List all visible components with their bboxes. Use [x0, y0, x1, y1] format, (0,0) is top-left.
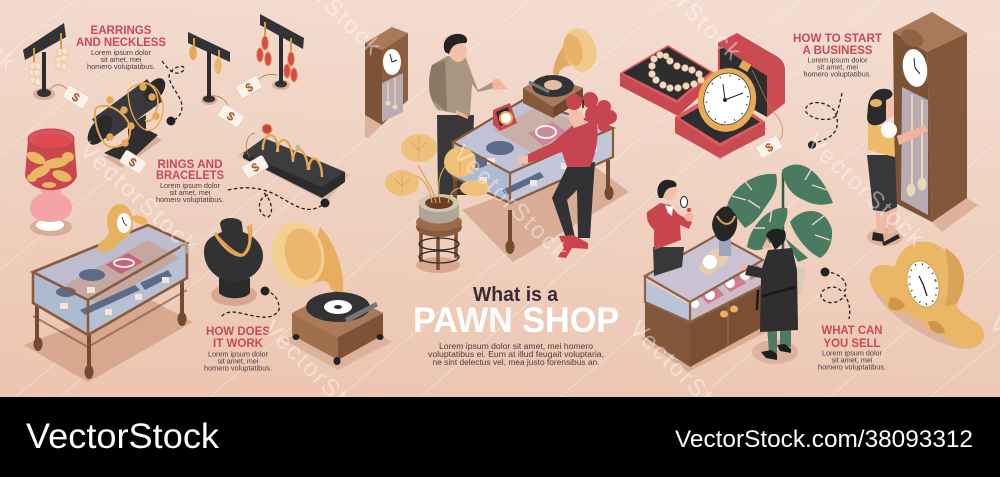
heading: rings and bracelets: [156, 157, 224, 204]
connector dot: [166, 116, 176, 126]
gold mantel clock: [862, 234, 988, 362]
heading: what is a pawn shop: voluptatibus ei. Eum at illud feugait voluptaria,: [428, 350, 604, 359]
dashed connector: what can you sell: [821, 272, 850, 319]
price tag 6: [755, 135, 783, 159]
earring stand: pearl earrings: [23, 23, 68, 100]
connector dot: [808, 141, 816, 149]
heading: what is a pawn shop: Lorem ipsum dolor sit amet, mei homero: [439, 342, 594, 351]
heading: how to start a business: A BUSINESS: [802, 43, 872, 57]
small gramophone: [523, 25, 601, 118]
heading: what is a pawn shop: PAWN SHOP: [413, 301, 619, 340]
watermarks: VectorStock: [448, 140, 574, 266]
tall grandfather clock: [893, 12, 978, 232]
man in coat: [740, 229, 798, 364]
heading: rings and bracelets: BRACELETS: [156, 168, 224, 182]
heading: what is a pawn shop: What is a: [473, 284, 559, 306]
heading: what is a pawn shop: [413, 284, 619, 367]
heading: earrings and neckless: homero voluptatibus.: [87, 64, 155, 71]
price tag 4: $: [243, 80, 256, 95]
heading: how to start a business: Lorem ipsum dolor: [808, 58, 868, 64]
heading: earrings and neckless: sit amet, mei: [100, 57, 142, 64]
heading: how to start a business: sit amet, mei: [817, 64, 858, 72]
heading: what can you sell: WHAT CAN: [822, 323, 882, 337]
gold mantel clock on case: [95, 204, 149, 256]
heading: earrings and neckless: Lorem ipsum dolor: [91, 50, 152, 57]
heading: earrings and neckless: [76, 23, 166, 71]
price tag 1: $: [69, 90, 83, 105]
connector dot: [320, 198, 330, 208]
connector dot: [820, 268, 830, 276]
jewellery box with watch: [493, 103, 517, 131]
heading: how to start a business: [793, 31, 883, 78]
heading: rings and bracelets: sit amet, mei: [170, 190, 211, 197]
heading: rings and bracelets: homero voluptatibus.: [156, 197, 224, 204]
footer band: VectorStock.com/38093312: [675, 426, 973, 453]
dashed connector: rings: [228, 188, 325, 217]
heading: how does it work: homero voluptatibus.: [204, 366, 272, 372]
price tag 2: [119, 150, 147, 175]
watermarks: VectorStock: [624, 315, 750, 441]
footer band: [0, 397, 1000, 477]
price tag 6: $: [763, 140, 776, 155]
heading: what can you sell: homero voluptatibus.: [818, 364, 886, 372]
price tag 3: $: [224, 109, 238, 124]
potted plant on stool: [385, 134, 490, 273]
heading: how to start a business: HOW TO START: [793, 31, 883, 45]
watermarks: VectorStock: [801, 130, 930, 252]
price tag 1: [62, 85, 90, 110]
heading: how does it work: HOW DOES: [206, 324, 270, 338]
price tag 4: [235, 75, 263, 99]
heading: how to start a business: homero voluptatibus.: [804, 72, 872, 78]
earring stand: red earrings: [257, 14, 304, 90]
display case left: [24, 225, 193, 382]
heading: how does it work: IT WORK: [213, 336, 263, 350]
heading: rings and bracelets: RINGS AND: [158, 157, 223, 171]
heading: what can you sell: [818, 323, 886, 372]
heading: earrings and neckless: EARRINGS: [90, 23, 152, 37]
table lamp: [25, 129, 77, 236]
heading: rings and bracelets: Lorem ipsum dolor: [160, 183, 221, 190]
shop owner: [429, 34, 507, 195]
gramophone: [266, 217, 392, 370]
centre display case with customers: [429, 25, 629, 262]
dashed connector: how does it work: [221, 291, 279, 318]
bust on cabinet: [712, 206, 737, 256]
price tag 3: [217, 104, 245, 129]
heading: what can you sell: YOU SELL: [824, 336, 880, 350]
price tag 5: $: [249, 160, 262, 175]
small grandfather clock: [365, 27, 408, 138]
heading: how does it work: [204, 324, 272, 372]
dashed connector: earrings: [162, 61, 184, 121]
earring stand: gold earrings: [188, 32, 230, 106]
monstera plant: [727, 164, 833, 298]
woman customer: [517, 92, 617, 258]
woman at clock: [867, 89, 928, 246]
bracelet stand: [83, 74, 169, 168]
watermarks: VectorStock: [258, 315, 384, 441]
display cabinet right: [640, 235, 770, 372]
heading: what is a pawn shop: ne sint delectus vel, mea justo forensibus an.: [432, 358, 600, 367]
heading: what can you sell: Lorem ipsum dolor: [822, 350, 883, 358]
connector dot: [260, 286, 270, 296]
watermarks: VectorStock: [74, 137, 203, 259]
ring display: [238, 124, 350, 202]
dashed connector: how to start: [806, 93, 842, 145]
heading: what can you sell: sit amet, mei: [832, 358, 873, 364]
price tag 2: $: [126, 155, 140, 170]
man with magnifier: [647, 180, 694, 276]
heading: earrings and neckless: AND NECKLESS: [76, 35, 166, 49]
price tag 5: [241, 155, 269, 179]
necklace bust: [204, 218, 263, 306]
footer band: VectorStock: [26, 417, 220, 456]
open watch box: [675, 33, 785, 160]
heading: how does it work: Lorem ipsum dolor: [208, 352, 269, 358]
heading: how does it work: sit amet, mei: [218, 358, 259, 366]
pearl necklace box: [620, 45, 713, 116]
